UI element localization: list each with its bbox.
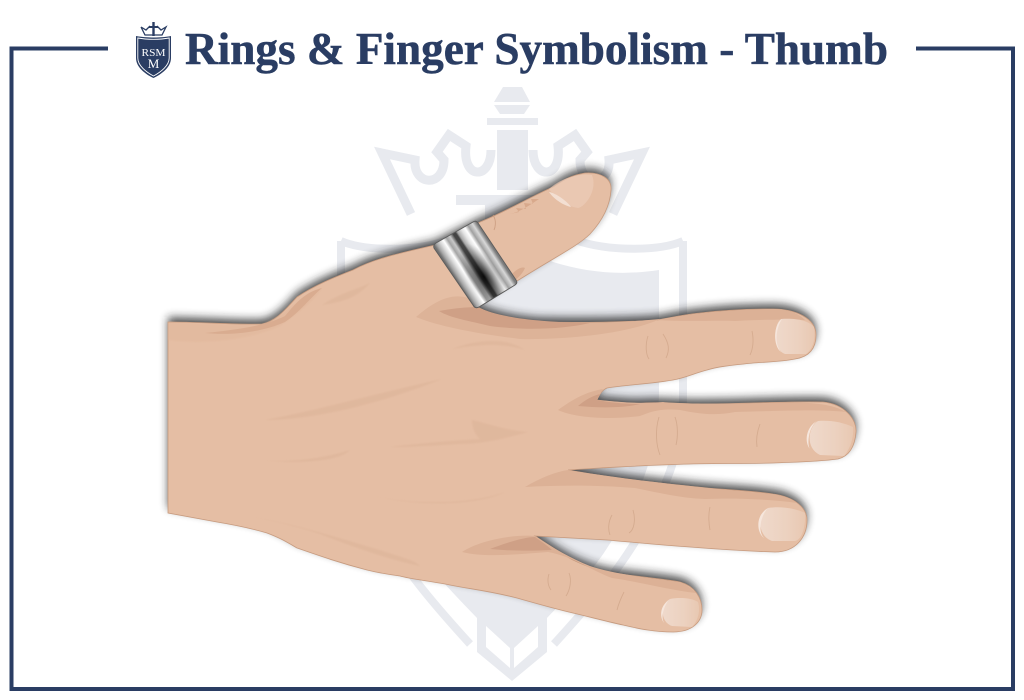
logo shield [136, 36, 171, 78]
ring contact shadow on thumb [505, 268, 525, 285]
ring shading [434, 221, 517, 308]
veins [248, 283, 528, 566]
watermark crown [382, 135, 642, 214]
hand silhouette [168, 173, 856, 632]
watermark shield outline [341, 240, 683, 644]
thumb knuckle wrinkles [510, 199, 539, 214]
fold: ring to pinky web outer [462, 536, 696, 593]
watermark: crest [341, 87, 683, 681]
fold: thumb web inner [439, 307, 590, 329]
watermark sword pommel [494, 87, 530, 114]
knuckle creases [493, 215, 760, 610]
fold: index to middle web inner [578, 394, 640, 407]
fold: middle to ring web [525, 470, 797, 503]
logo: crest [136, 22, 171, 78]
logo crown [141, 26, 166, 35]
fold: ring to pinky web inner [490, 537, 552, 551]
nail: ring [758, 507, 805, 541]
logo monogram: RSM [142, 48, 166, 59]
fold: thumb web outer [416, 296, 660, 339]
fold: wrist top [168, 288, 322, 342]
logo sword [149, 22, 158, 36]
illustration: hand with ring [168, 168, 856, 632]
nail: middle [807, 421, 853, 456]
watermark sword guard and blade [456, 118, 568, 270]
logo monogram lower: M [148, 56, 160, 71]
nail: pinky [661, 598, 699, 627]
nail: thumb [549, 175, 594, 208]
hand drop shadow [168, 168, 856, 627]
fingernails [549, 175, 853, 627]
ring band [434, 221, 517, 308]
watermark shield fill [365, 240, 659, 681]
fold: wrist crease [205, 288, 322, 334]
skin shading folds [168, 283, 846, 593]
fold: index finger top [657, 309, 805, 321]
nail: index [775, 319, 815, 354]
fold: index to middle web outer [558, 389, 846, 418]
ring [434, 221, 517, 308]
logo shield inner line [138, 38, 169, 76]
title: Rings & Finger Symbolism - Thumb [185, 23, 888, 74]
